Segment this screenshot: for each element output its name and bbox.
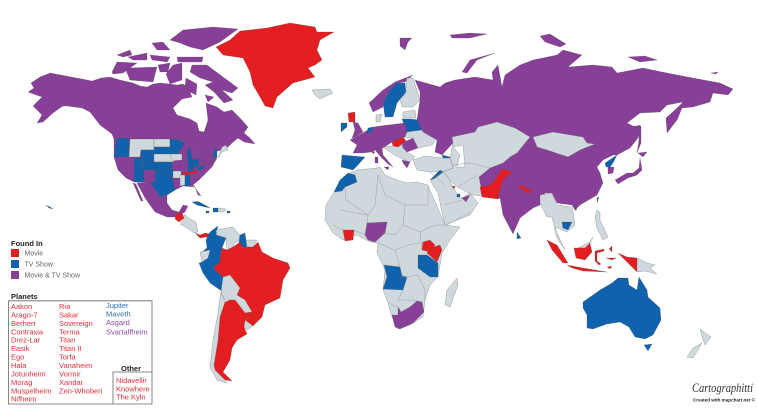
legend: Found In: TV Show bbox=[24, 262, 54, 268]
panel: Planets list: Muspelheim bbox=[11, 386, 51, 395]
panel: Planets list: Arago-7 bbox=[11, 310, 38, 319]
panel: Planets list: Nidavellir bbox=[116, 376, 147, 385]
Central Asia and Iran bbox=[443, 122, 530, 196]
map: North America bbox=[28, 23, 334, 238]
panel: Planets list: Contraxia bbox=[11, 327, 44, 336]
panel: Planets list: Titan II bbox=[59, 344, 82, 353]
USA base bbox=[114, 139, 217, 197]
US states bbox=[114, 138, 228, 197]
legend: Found In: Movie & TV Show bbox=[24, 272, 81, 280]
panel: Planets list: Easik bbox=[11, 344, 30, 353]
panel: Planets list: Aakon bbox=[11, 302, 32, 311]
panel: Planets list: Asgard bbox=[106, 318, 130, 327]
panel: Planets list: Ria bbox=[59, 302, 71, 311]
panel: Planets list: Sovereign bbox=[59, 319, 93, 328]
panel: Planets list: Jotunheim bbox=[11, 369, 46, 378]
legend: Found In: Found In bbox=[11, 239, 43, 248]
Mexico and Central America bbox=[137, 182, 188, 217]
panel: Planets list: Nifheim bbox=[11, 395, 36, 404]
panel: Planets list: Xandar bbox=[59, 378, 84, 387]
credit: Cartographitti bbox=[692, 380, 756, 402]
legend: Found In: Movie bbox=[24, 250, 43, 258]
panel: Planets list: Titan bbox=[59, 336, 75, 345]
panel: Planets list: Ego bbox=[11, 353, 24, 362]
legend: Found In bbox=[11, 239, 81, 280]
panel: Planets list: Torfa bbox=[59, 353, 77, 362]
map: Southeast Asia and Oceania bbox=[547, 210, 711, 358]
panel: Planets list: Vanaheim bbox=[59, 361, 92, 370]
map: Africa bbox=[325, 167, 460, 329]
credit: Cartographitti: Created with mapchart.net © bbox=[693, 396, 756, 402]
map: Europe bbox=[312, 38, 437, 170]
map: South America bbox=[199, 226, 290, 383]
panel: Planets list: Knowhere bbox=[116, 384, 150, 394]
panel: Planets list: Jupiter bbox=[106, 301, 129, 310]
panel: Planets list: Planets bbox=[11, 292, 38, 301]
panel: Planets list: Other bbox=[121, 364, 141, 373]
panel: Planets list: Svartalfheim bbox=[106, 328, 148, 336]
panel: Planets list: Sakar bbox=[59, 310, 79, 319]
map: Russia and East Asia bbox=[413, 33, 733, 250]
panel: Planets list: Berhert bbox=[11, 319, 37, 328]
panel: Planets list: Vormir bbox=[59, 369, 81, 378]
panel: Planets list: Drez-Lar bbox=[11, 336, 41, 345]
panel: Planets list: The Kyln bbox=[116, 392, 146, 402]
Caribbean bbox=[192, 202, 210, 208]
panel: Planets list: Morag bbox=[11, 378, 32, 387]
panel: Planets list: Terma bbox=[59, 327, 81, 336]
panel: Planets list: Maveth bbox=[106, 310, 131, 318]
panel: Planets list: Zen-Whoberi bbox=[59, 386, 103, 395]
panel: Planets list: Hala bbox=[11, 361, 27, 370]
Greenland bbox=[216, 23, 334, 108]
panel: Planets list bbox=[8, 292, 152, 404]
